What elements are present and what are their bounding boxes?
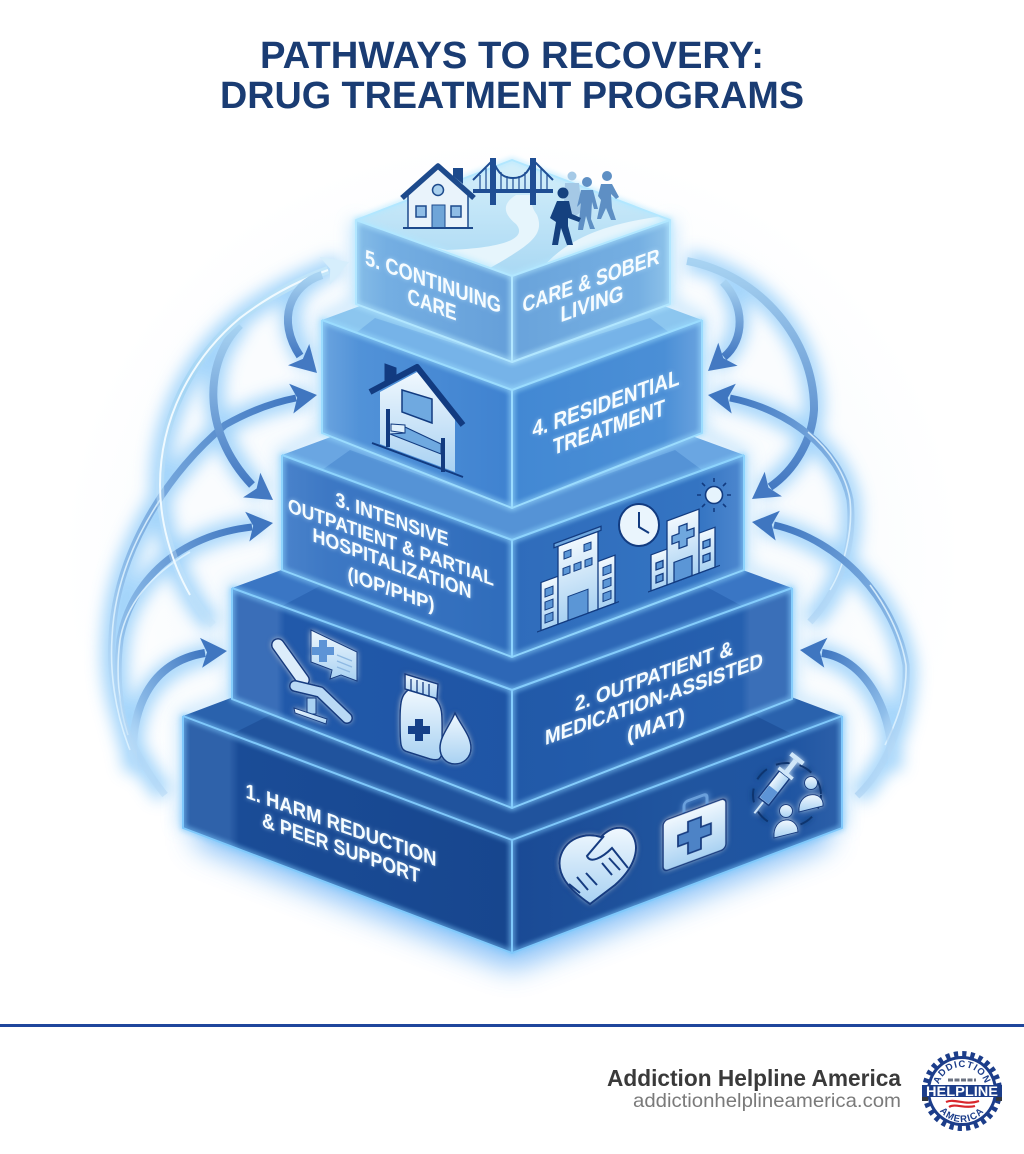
logo badge bbox=[922, 1051, 1002, 1131]
arrows: left side bbox=[111, 248, 354, 795]
pyramid tier 5 bbox=[356, 158, 670, 362]
label: tier 3: (IOP/PHP) bbox=[348, 563, 434, 617]
label: tier 2: 2. OUTPATIENT & bbox=[575, 635, 733, 716]
background halo bbox=[62, 140, 962, 980]
arrow: to tier 3 right bbox=[750, 507, 906, 796]
icon: treatment chair and note bbox=[278, 630, 357, 724]
icon: hospital building bbox=[648, 501, 720, 592]
pyramid tier 1 bbox=[183, 592, 842, 953]
pyramid tier 4 bbox=[322, 250, 702, 508]
icon: handshake heart bbox=[559, 828, 636, 904]
footer rule bbox=[0, 1024, 1024, 1027]
title: DRUG TREATMENT PROGRAMS bbox=[220, 75, 804, 117]
logo badge: HELPLINE bbox=[926, 1084, 998, 1099]
icon: syringe and people bbox=[747, 751, 823, 838]
arrow: mid left inner curve bbox=[213, 325, 282, 512]
label: tier 4 bbox=[532, 365, 680, 461]
road and hills on top bbox=[435, 195, 666, 268]
arrow: to tier 4 left bbox=[111, 380, 319, 795]
footer text bbox=[607, 1065, 901, 1112]
label: tier 5 right bbox=[522, 243, 660, 327]
pyramid tier 2 bbox=[232, 486, 792, 808]
label: tier 5 right: CARE & SOBER bbox=[522, 243, 660, 318]
arrow: pale left long arc bbox=[160, 248, 354, 625]
icon: bridge bbox=[473, 158, 553, 205]
label: tier 5 right: LIVING bbox=[560, 279, 624, 327]
arrow: to tier 3 left bbox=[118, 508, 275, 770]
label: tier 4: 4. RESIDENTIAL bbox=[532, 365, 680, 443]
icon: medication bottle and drop bbox=[400, 674, 471, 764]
icon: house bbox=[402, 166, 474, 228]
icon: first aid kit bbox=[663, 787, 726, 872]
icon: sun bbox=[697, 478, 731, 512]
arrows: right side bbox=[687, 261, 906, 796]
label: tier 3: HOSPITALIZATION bbox=[312, 524, 472, 603]
arrow: upper left inner curve bbox=[288, 275, 328, 384]
logo badge: ADDICTION bbox=[934, 1060, 991, 1084]
arrow: to tier 4 right bbox=[706, 380, 851, 622]
icon: clock bbox=[619, 504, 659, 546]
title: PATHWAYS TO RECOVERY: bbox=[260, 35, 764, 77]
arrow: to tier 2 right bbox=[798, 635, 892, 770]
label: tier 2: MEDICATION-ASSISTED bbox=[545, 647, 763, 750]
label: tier 1: & PEER SUPPORT bbox=[262, 807, 420, 888]
arrow: to tier 2 left bbox=[133, 636, 228, 770]
arrow: upper right inner curve bbox=[698, 282, 740, 382]
label: tier 1: 1. HARM REDUCTION bbox=[246, 778, 436, 871]
label: tier 3: 3. INTENSIVE bbox=[336, 488, 448, 551]
label: tier 5 left: 5. CONTINUING bbox=[365, 244, 501, 318]
label: tier 3: OUTPATIENT & PARTIAL bbox=[288, 494, 494, 591]
icon: residential house with bed bbox=[370, 364, 463, 477]
pyramid tier 3 bbox=[282, 370, 744, 657]
footer text: Addiction Helpline America bbox=[607, 1065, 901, 1091]
title bbox=[220, 35, 804, 117]
label: tier 4: TREATMENT bbox=[553, 395, 665, 461]
label: tier 2: (MAT) bbox=[627, 702, 685, 747]
footer text: addictionhelplineamerica.com bbox=[633, 1090, 901, 1112]
arrow: long right curve to tier 3 bbox=[687, 261, 814, 511]
icon: clinic building bbox=[537, 520, 619, 632]
label: tier 5 left: CARE bbox=[408, 283, 456, 326]
icon: walking people bbox=[550, 171, 619, 245]
logo badge: AMERICA bbox=[940, 1108, 984, 1122]
